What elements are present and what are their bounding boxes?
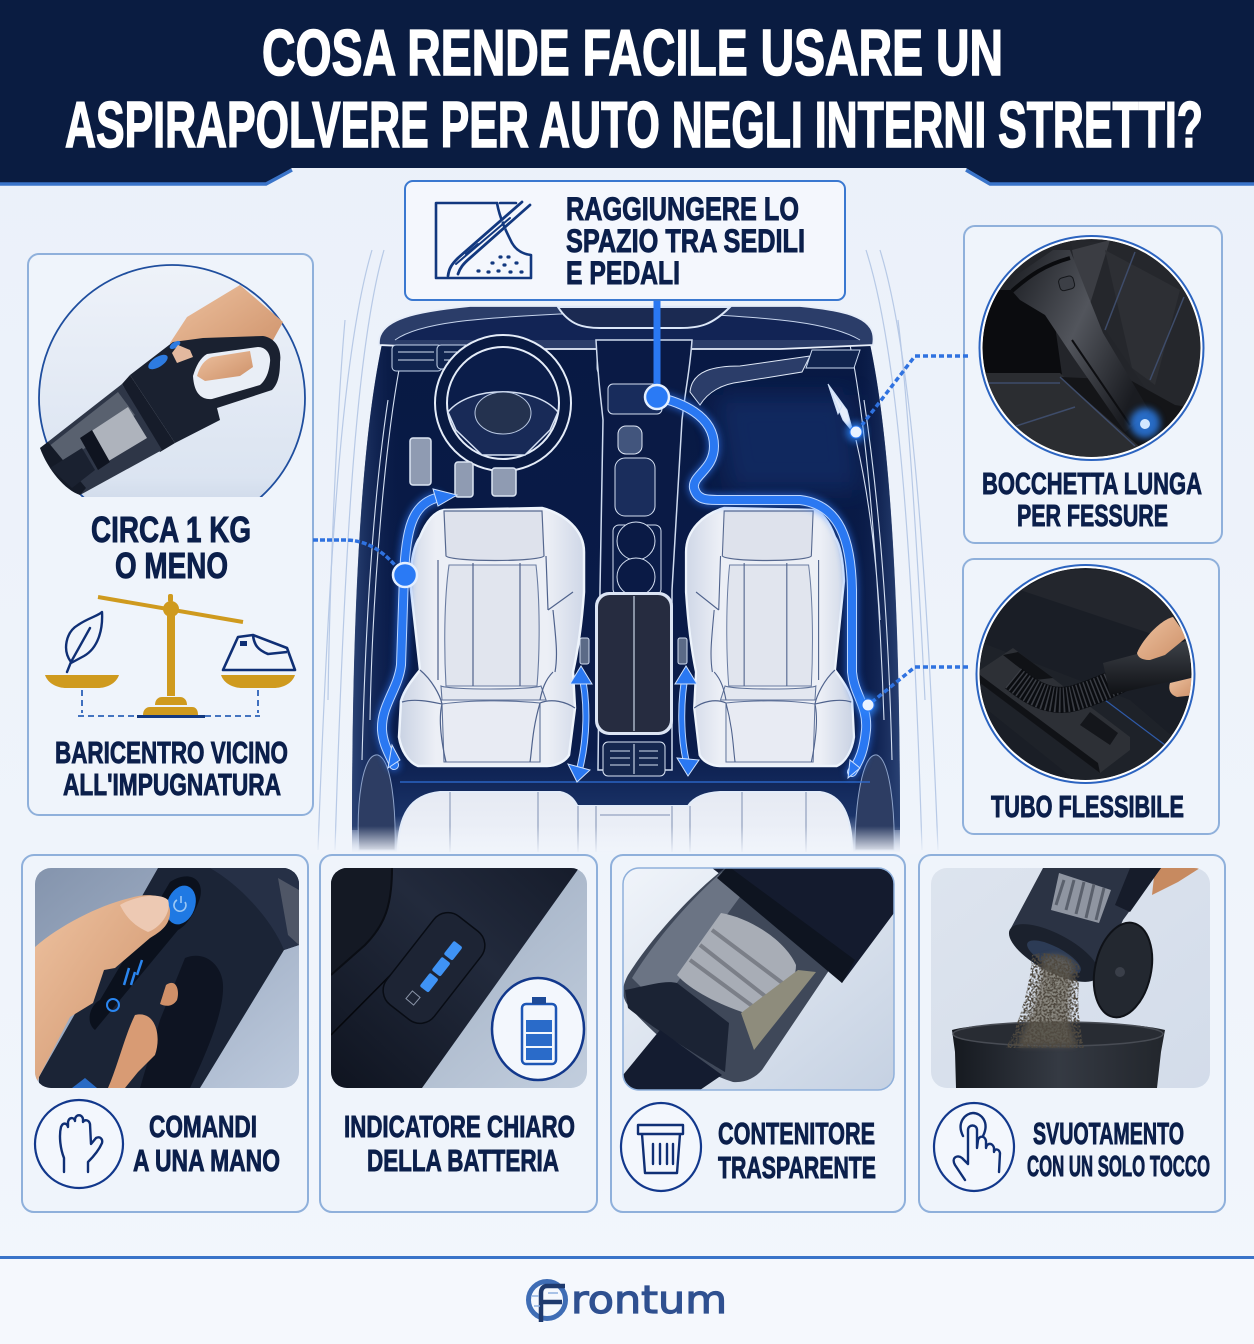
container text: TRASPARENTE xyxy=(718,1150,876,1185)
blue reach paths xyxy=(382,397,866,775)
path arrowheads xyxy=(388,489,860,782)
icon: battery badge xyxy=(492,978,584,1080)
logo: Frontum: rontum xyxy=(571,1278,727,1322)
photo: nozzle in seat gap xyxy=(980,236,1205,470)
panel: flexible hose xyxy=(963,559,1219,834)
rear seats xyxy=(398,792,852,852)
center console xyxy=(596,340,692,776)
right side nozzle mark xyxy=(828,384,853,432)
center of gravity text: BARICENTRO VICINO xyxy=(55,735,288,770)
controls text xyxy=(133,1109,280,1178)
weight text: O MENO xyxy=(115,545,228,586)
icon: tap finger xyxy=(934,1103,1014,1191)
photo: handheld vacuum in hand xyxy=(38,264,306,497)
battery text: INDICATORE CHIARO xyxy=(344,1109,575,1144)
panel: one-hand controls xyxy=(22,855,308,1212)
dashboard xyxy=(379,306,874,405)
bottom fade xyxy=(310,826,940,854)
callout text: E PEDALI xyxy=(566,255,680,291)
panel: long crevice nozzle xyxy=(964,226,1222,543)
left front seat xyxy=(399,508,584,766)
icon: nozzle reaching a gap xyxy=(436,202,531,278)
controls text: COMANDI xyxy=(149,1109,257,1144)
panel: weight and balance xyxy=(28,254,313,815)
container text: CONTENITORE xyxy=(718,1116,875,1151)
battery text: DELLA BATTERIA xyxy=(367,1143,559,1178)
nozzle text: PER FESSURE xyxy=(1017,498,1168,533)
callout stem xyxy=(654,300,660,397)
photo: thumb on power button xyxy=(35,868,299,1088)
armrest xyxy=(580,592,687,735)
logo: Frontum xyxy=(528,1278,727,1322)
pedals xyxy=(410,438,516,497)
photo: battery LEDs xyxy=(331,868,587,1088)
title xyxy=(65,16,1203,161)
panel: battery indicator xyxy=(320,855,597,1212)
right front seat xyxy=(686,508,854,766)
weight text xyxy=(91,509,251,586)
emptying text xyxy=(1027,1116,1210,1183)
photo: hose and tool xyxy=(975,565,1200,800)
nozzle text xyxy=(982,466,1202,533)
callout text xyxy=(566,191,805,291)
car interior illustration xyxy=(310,250,940,854)
dark floor area xyxy=(352,335,900,852)
photo: emptying dust into bin xyxy=(931,868,1210,1088)
callout: seats and pedals xyxy=(405,181,845,300)
icon: trash bin xyxy=(621,1103,701,1191)
steering wheel xyxy=(435,335,571,471)
icon: hand xyxy=(35,1100,123,1188)
connector lines and dots xyxy=(313,356,968,715)
footer band xyxy=(0,1256,1254,1344)
container text xyxy=(718,1116,876,1185)
controls text: A UNA MANO xyxy=(133,1143,280,1178)
photo: clear dust bin xyxy=(623,866,894,1090)
callout text: SPAZIO TRA SEDILI xyxy=(566,223,805,259)
center of gravity text xyxy=(55,735,288,802)
icon: balance scale xyxy=(45,594,295,718)
panel: one-touch emptying xyxy=(919,855,1225,1212)
center of gravity text: ALL'IMPUGNATURA xyxy=(63,767,281,802)
header band xyxy=(0,0,1254,184)
callout text: RAGGIUNGERE LO xyxy=(566,191,799,227)
weight text: CIRCA 1 KG xyxy=(91,509,251,550)
panel: transparent container xyxy=(611,855,905,1212)
battery text xyxy=(344,1109,575,1178)
car body outline xyxy=(318,250,938,850)
